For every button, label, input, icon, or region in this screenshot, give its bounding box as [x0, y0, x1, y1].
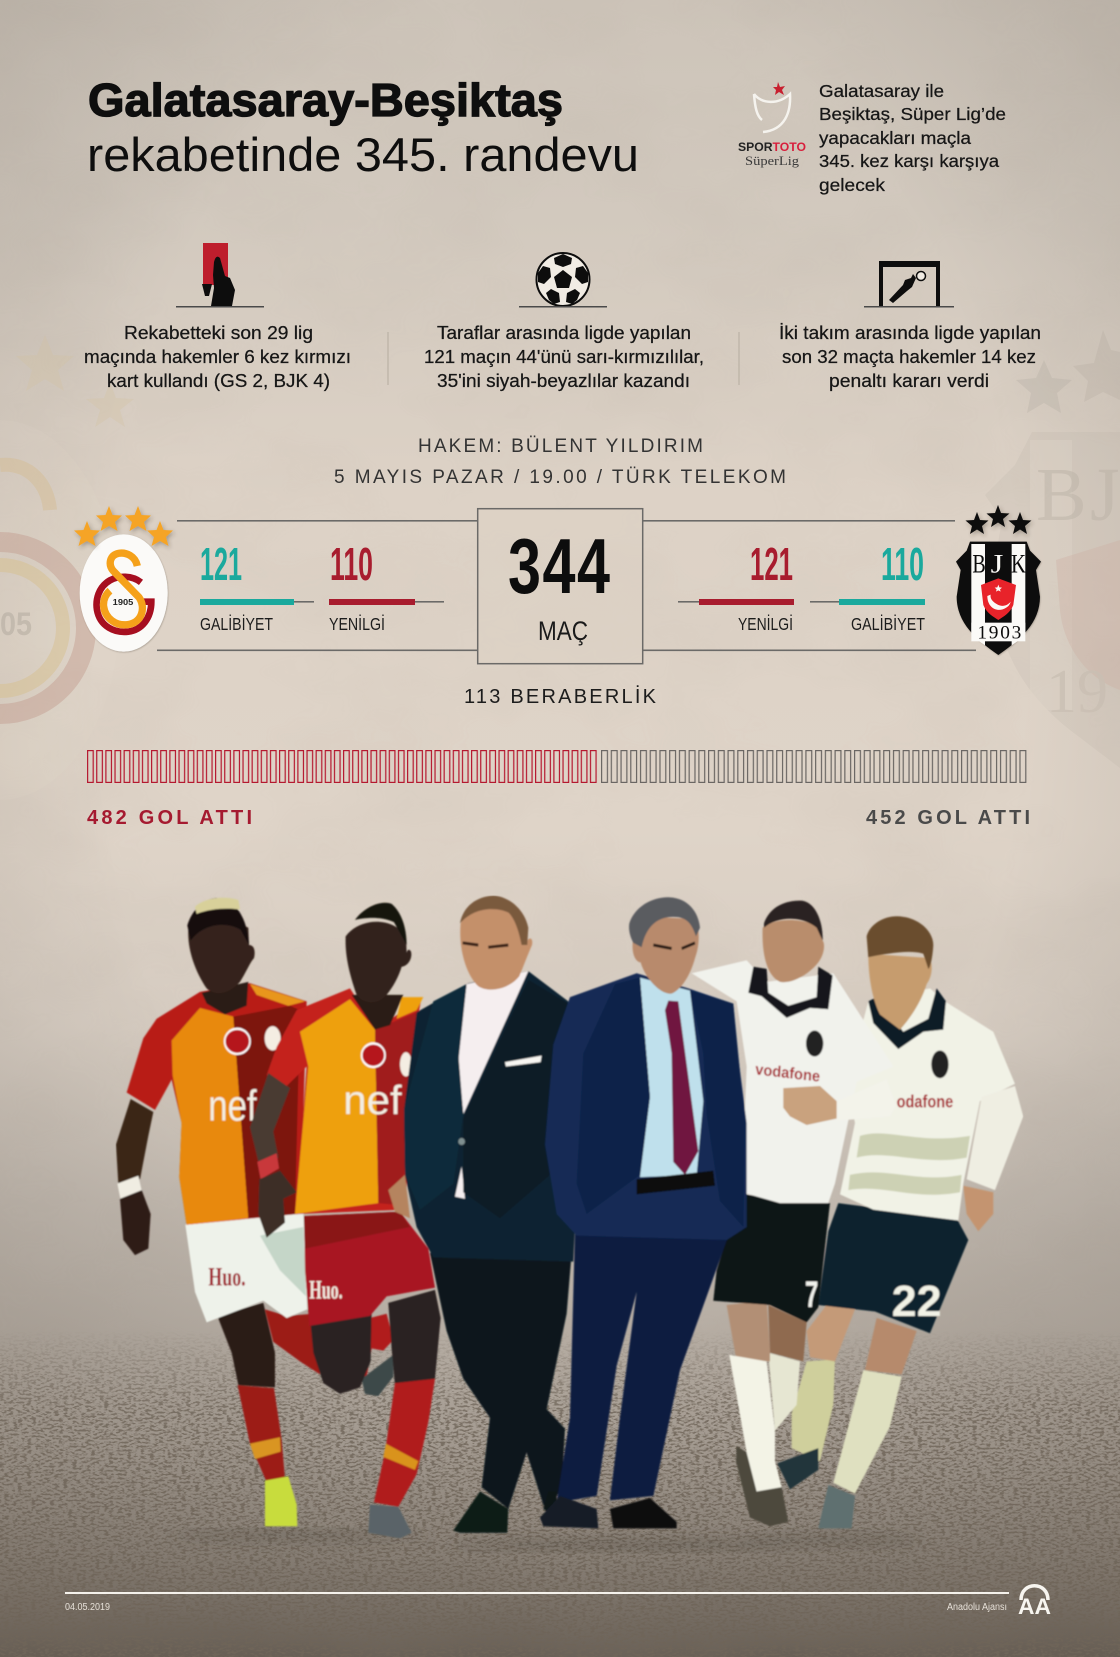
- panel: total matches: MAÇ: [538, 616, 588, 646]
- logo: Beşiktaş: J: [991, 549, 1003, 579]
- text: red cards: [84, 323, 351, 391]
- stats: Beşiktaş wins: 110: [881, 538, 924, 590]
- intro text: Galatasaray ile: [819, 81, 944, 101]
- match details: HAKEM: BÜLENT YILDIRIM: [418, 436, 703, 457]
- figure: Galatasaray player 1: nef: [208, 1083, 257, 1131]
- figure: Galatasaray player 1: [116, 898, 320, 1526]
- figure: Galatasaray player 1: Huo.: [208, 1263, 246, 1292]
- text: red cards: kart kullandı (GS 2, BJK 4): [107, 371, 330, 391]
- figure: Beşiktaş player 7: 7: [805, 1274, 818, 1315]
- footer: 04.05.2019: [65, 1602, 110, 1613]
- logo: Anadolu Ajansı: AA: [1018, 1594, 1051, 1619]
- figure: Beşiktaş coach: [540, 897, 747, 1528]
- stats: Galatasaray wins: 121: [200, 538, 242, 590]
- goals: Galatasaray: 482 GOL ATTI: [87, 807, 252, 829]
- stats: Galatasaray losses: [329, 538, 444, 634]
- stats: Beşiktaş losses: [678, 538, 794, 634]
- icon: goalkeeper: [864, 261, 954, 308]
- players and coaches: [116, 896, 1023, 1538]
- ground shadows: [170, 1530, 920, 1551]
- figure: Galatasaray player 2: Huo.: [309, 1276, 343, 1305]
- figure: Beşiktaş player 7: vodafone: [755, 1060, 821, 1085]
- text: penalties: penaltı kararı verdi: [829, 371, 989, 391]
- intro text: Beşiktaş, Süper Lig’de: [819, 104, 1006, 124]
- logo: Galatasaray: 1905: [113, 597, 134, 607]
- stats: Galatasaray losses: 110: [330, 538, 373, 590]
- text: penalties: son 32 maçta hakemler 14 kez: [782, 347, 1036, 367]
- logo: Beşiktaş: 1903: [977, 622, 1021, 643]
- panel: red cards: [84, 243, 351, 391]
- footer: [65, 1586, 1051, 1619]
- stats: Galatasaray wins: GALİBİYET: [200, 614, 273, 634]
- figure: Beşiktaş player 7: [692, 901, 896, 1526]
- figure: Beşiktaş player 22: odafone: [897, 1093, 954, 1112]
- text: red cards: maçında hakemler 6 kez kırmızı: [84, 347, 351, 367]
- panel: wins: [424, 253, 704, 391]
- icon: Beşiktaş stars: [966, 505, 1032, 534]
- stats: Beşiktaş losses: YENİLGİ: [738, 614, 793, 634]
- text: wins: [424, 323, 704, 391]
- text: wins: 35'ini siyah-beyazlılar kazandı: [437, 371, 690, 391]
- title: [87, 74, 639, 181]
- intro text: 345. kez karşı karşıya: [819, 151, 999, 171]
- intro text: [819, 81, 1006, 195]
- icon: red card in hand: [176, 243, 264, 308]
- match details: 5 MAYIS PAZAR / 19.00 / TÜRK TELEKOM: [334, 467, 786, 488]
- stats: Galatasaray wins: [200, 538, 314, 634]
- intro text: yapacakları maçla: [819, 128, 971, 148]
- icon: Süper Lig logo: SüperLig: [745, 153, 800, 168]
- watermark: Beşiktaş crest: J: [1090, 453, 1120, 537]
- intro text: gelecek: [819, 175, 885, 195]
- text: red cards: Rekabetteki son 29 lig: [124, 323, 313, 343]
- stats: Galatasaray losses: YENİLGİ: [329, 614, 385, 634]
- text: wins: 121 maçın 44'ünü sarı-kırmızılılar,: [424, 347, 704, 367]
- watermark: Galatasaray crest: 05: [0, 606, 32, 642]
- watermark: faint stars: [16, 330, 1120, 427]
- goals bar chart: [87, 750, 1029, 783]
- footer: Anadolu Ajansı: [947, 1602, 1007, 1613]
- watermark: Beşiktaş crest: 19: [1046, 658, 1108, 726]
- figure: Galatasaray coach: [404, 896, 575, 1533]
- logo: Beşiktaş: [956, 542, 1041, 655]
- goals: Beşiktaş: 452 GOL ATTI: [866, 807, 1030, 829]
- title: rekabetinde 345. randevu: [87, 128, 639, 181]
- icon: Galatasaray stars: [74, 506, 173, 546]
- logo: Beşiktaş: B: [972, 549, 986, 579]
- panel: penalties: [779, 261, 1041, 391]
- figure: Beşiktaş player 22: [777, 916, 1023, 1528]
- watermark: Beşiktaş crest: [985, 432, 1120, 768]
- draws: 113 BERABERLİK: [464, 685, 657, 708]
- figure: Beşiktaş player 22: 22: [892, 1278, 942, 1326]
- logo: Galatasaray: [80, 534, 168, 652]
- text: wins: Taraflar arasında ligde yapılan: [437, 323, 691, 343]
- watermark: Beşiktaş crest: B: [1036, 453, 1087, 537]
- icon: Süper Lig logo: [738, 82, 806, 168]
- scoreboard frame lines: [157, 520, 976, 651]
- icon: football: [519, 253, 607, 308]
- watermark: Galatasaray crest: [0, 420, 120, 800]
- stats: Beşiktaş losses: 121: [750, 538, 793, 590]
- icon: Süper Lig logo: SPORTOTO: [738, 140, 806, 154]
- stats: Beşiktaş wins: GALİBİYET: [851, 614, 925, 634]
- text: penalties: [779, 323, 1041, 391]
- stats: Beşiktaş wins: [810, 538, 925, 634]
- panel: total matches: 344: [508, 522, 611, 610]
- title: Galatasaray-Beşiktaş: [88, 74, 563, 126]
- figure: Galatasaray player 2: nef: [343, 1077, 403, 1123]
- panel: total matches: [478, 509, 643, 664]
- match details: [334, 436, 786, 488]
- figure: Galatasaray player 2: [250, 903, 441, 1538]
- text: penalties: İki takım arasında ligde yapılan: [779, 323, 1041, 343]
- logo: Beşiktaş: K: [1011, 549, 1026, 579]
